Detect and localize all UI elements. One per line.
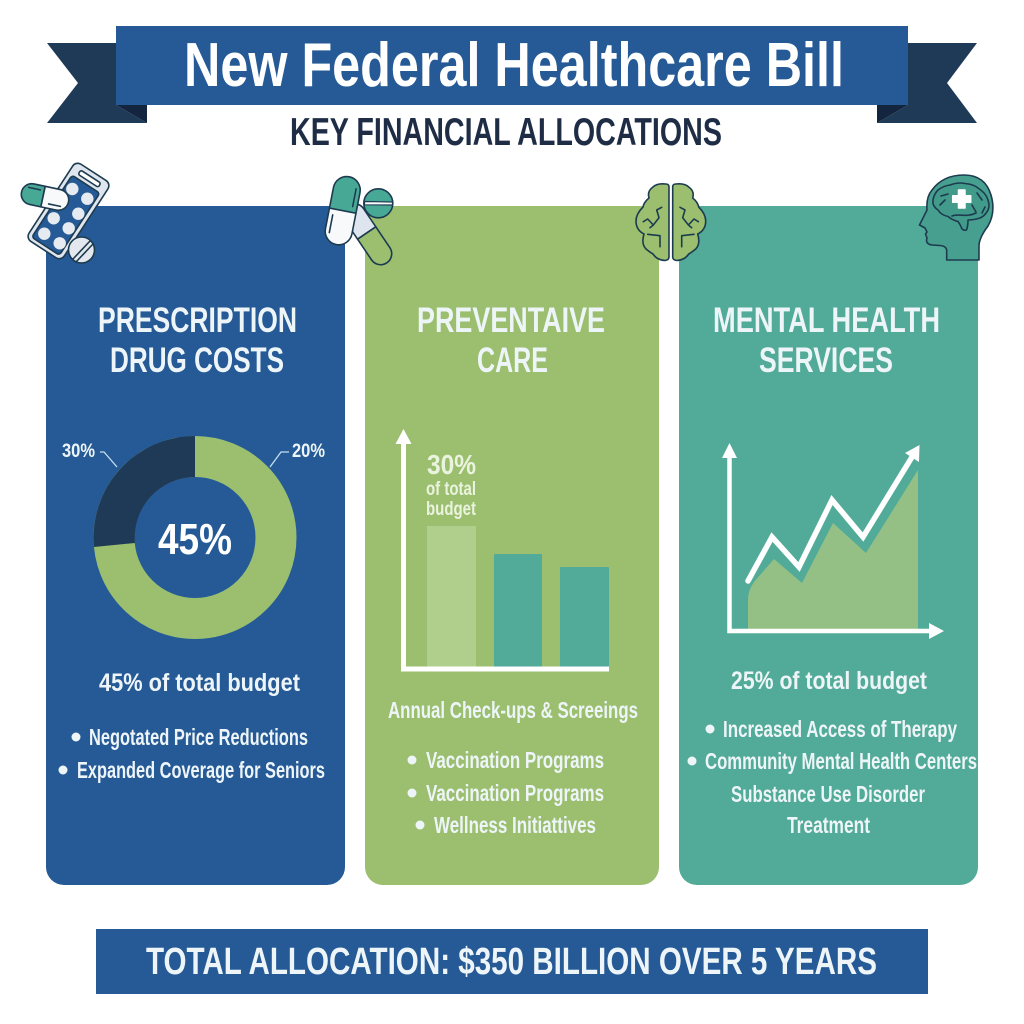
panel background [365, 206, 659, 885]
bar chart: 30% [427, 449, 476, 480]
heading: MENTAL HEALTH [713, 301, 940, 340]
heading [713, 301, 940, 380]
heading: SERVICES [759, 341, 893, 380]
donut chart: 20% [292, 441, 325, 462]
heading: CARE [477, 341, 548, 380]
icon: brain [636, 184, 706, 260]
heading [98, 301, 297, 380]
icon: blister pack and capsule [19, 161, 111, 263]
icon: capsules and tablet [323, 174, 396, 269]
bullet list: Wellness Initiattives [434, 812, 596, 838]
heading [417, 301, 605, 380]
panel background [46, 206, 345, 885]
bullet list: Negotated Price Reductions [89, 724, 308, 750]
ribbon fold shadows [116, 105, 908, 123]
icon: head with brain and medical cross [920, 175, 993, 260]
subtitle: KEY FINANCIAL ALLOCATIONS [290, 111, 722, 154]
panel: mental health services [679, 206, 978, 885]
budget share: 25% of total budget [731, 667, 928, 695]
heading: PRESCRIPTION [98, 301, 297, 340]
heading: DRUG COSTS [110, 341, 284, 380]
ribbon tail: right [877, 43, 977, 123]
bar chart [396, 429, 609, 669]
bullet list: Vaccination Programs [426, 780, 604, 806]
donut chart [62, 436, 325, 618]
bullet list: Treatment [787, 812, 870, 838]
heading: PREVENTAIVE [417, 301, 605, 340]
ribbon tail: left [47, 43, 147, 123]
title: New Federal Healthcare Bill [184, 31, 844, 100]
bullet list: Expanded Coverage for Seniors [77, 757, 325, 783]
panel background [679, 206, 978, 885]
bullet list [688, 716, 977, 838]
program summary: Annual Check-ups & Screeings [388, 697, 638, 723]
bullet list [408, 747, 604, 838]
banner bar [116, 26, 908, 105]
bar chart: of total [426, 479, 476, 500]
donut chart: 30% [62, 441, 95, 462]
bullet list [58, 724, 325, 783]
donut chart: 45% [158, 515, 232, 564]
panel: prescription drug costs [46, 206, 345, 885]
bullet list: Substance Use Disorder [731, 781, 925, 807]
total allocation bar [96, 929, 928, 994]
title banner [47, 26, 977, 123]
budget share: 45% of total budget [99, 669, 301, 697]
panel: preventive care [365, 206, 659, 885]
line and area chart [722, 443, 944, 639]
bullet list: Vaccination Programs [426, 747, 604, 773]
bar chart: budget [426, 499, 477, 520]
